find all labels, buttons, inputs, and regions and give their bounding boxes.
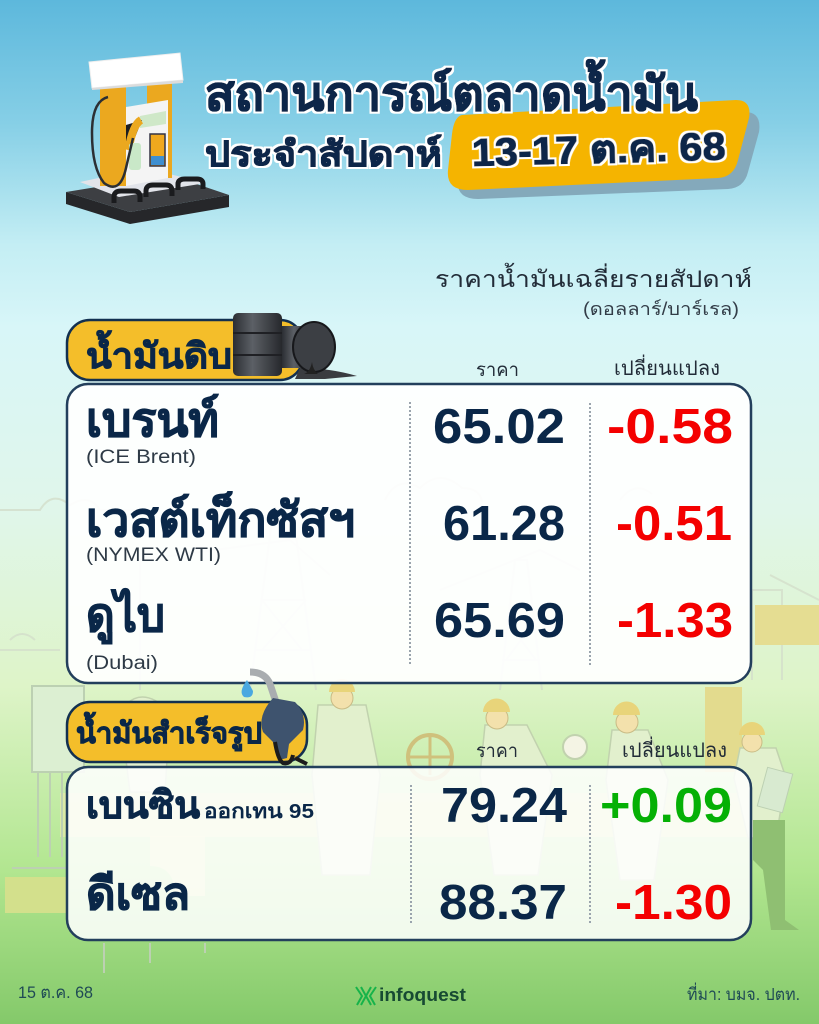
worker legs: [753, 820, 799, 930]
row: diesel: 88.37: [439, 876, 567, 930]
icon: oil barrels: [233, 313, 357, 379]
icon: fuel nozzle: [242, 672, 307, 764]
row: Brent: (ICE Brent): [86, 447, 196, 468]
date badge: 13-17 ต.ค. 68: [471, 125, 726, 175]
background illustration: pipes and workers: [5, 605, 819, 973]
row: Dubai: 65.69: [434, 594, 565, 648]
pump pillars and body: [100, 86, 126, 186]
column headers: เปลี่ยนแปลง: [622, 736, 727, 762]
column dividers: [411, 785, 590, 925]
row: Brent: -0.58: [607, 400, 733, 454]
footer source: ที่มา: บมจ. ปตท.: [687, 982, 800, 1004]
logo: infoquest: infoquest: [379, 985, 466, 1005]
pump nozzle: [128, 120, 141, 150]
heading: refined oil: [67, 702, 307, 762]
row: WTI: 61.28: [443, 497, 565, 551]
row: Dubai: -1.33: [617, 594, 733, 648]
pump base: [66, 192, 229, 224]
column headers: [476, 354, 720, 381]
row: Brent: [86, 393, 733, 468]
row: Dubai: (Dubai): [86, 653, 158, 674]
worker heads: [331, 687, 762, 752]
panel: refined oil: [67, 736, 751, 940]
title line 2: ประจำสัปดาห์: [205, 134, 442, 174]
row: diesel: -1.30: [615, 876, 732, 930]
valve wheel: [408, 735, 452, 779]
row: WTI: เวสต์เท็กซัสฯ: [86, 490, 355, 546]
pump cap: [89, 53, 183, 88]
subtitle: average weekly price: (ดอลลาร์/บาร์เรล): [583, 299, 739, 319]
background illustration: oil field line art: [0, 478, 819, 690]
worker helmets: [329, 679, 765, 735]
heading: crude oil: น้ำมันดิบ: [86, 330, 232, 376]
row: Brent: เบรนท์: [86, 393, 219, 446]
row: WTI: -0.51: [616, 497, 732, 551]
row: WTI: (NYMEX WTI): [86, 545, 221, 566]
column headers: [476, 736, 727, 762]
control box: [12, 686, 205, 973]
column headers: เปลี่ยนแปลง: [614, 354, 720, 380]
pipes: [5, 877, 68, 913]
row: gasohol 95: 79.24: [441, 779, 567, 833]
column headers: ราคา: [476, 741, 518, 762]
title: [205, 59, 698, 174]
pump handles: [114, 179, 203, 203]
column headers: ราคา: [476, 360, 519, 381]
row: Brent: 65.02: [433, 400, 565, 454]
row: Dubai: ดูไบ: [86, 587, 165, 645]
pump hose: [92, 97, 133, 187]
column dividers: [410, 402, 590, 666]
row: diesel: ดีเซล: [86, 870, 190, 919]
date badge: [448, 100, 759, 199]
pump platform: [80, 168, 206, 197]
heading: crude oil: [67, 320, 303, 380]
subtitle: average weekly price: [435, 263, 752, 319]
row: gasohol 95: เบนซิน: [86, 785, 200, 827]
workers: [120, 697, 786, 880]
row: gasohol 95: [86, 779, 732, 833]
heading: refined oil: น้ำมันสำเร็จรูป: [76, 711, 262, 751]
row: gasohol 95: ออกเทน 95: [204, 801, 314, 823]
subtitle: average weekly price: ราคาน้ำมันเฉลี่ยรายสัปดาห์: [435, 263, 752, 292]
row: Dubai: [86, 587, 733, 674]
footer date: 15 ต.ค. 68: [18, 983, 93, 1002]
icon: gas pump: [66, 53, 229, 224]
row: gasohol 95: +0.09: [600, 779, 732, 833]
row: diesel: [86, 870, 732, 930]
panel: crude oil: [67, 354, 751, 683]
row: WTI: [86, 490, 732, 566]
title line 1: สถานการณ์ตลาดน้ำมัน: [205, 59, 698, 120]
